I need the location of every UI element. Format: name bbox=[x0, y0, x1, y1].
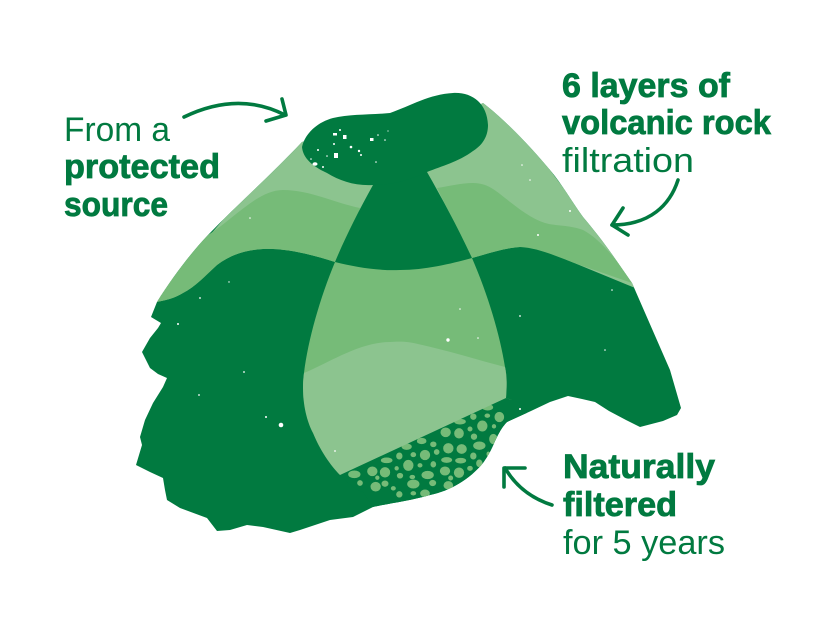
callout: naturally filtered bbox=[504, 448, 725, 562]
text: From a protected source bbox=[64, 111, 220, 224]
text: Naturally filtered for 5 years bbox=[563, 448, 725, 562]
arrow to gravel bbox=[504, 468, 552, 505]
upper layers, clipped to silhouette bbox=[157, 103, 634, 507]
text: Naturally filtered for 5 years: filtered bbox=[563, 486, 677, 524]
text: 6 layers of volcanic rock filtration: 6 layers of bbox=[562, 67, 731, 105]
mid layer left bbox=[150, 190, 360, 303]
text: 6 layers of volcanic rock filtration bbox=[562, 67, 771, 180]
mid layer right bbox=[437, 183, 632, 283]
crater blob bbox=[302, 93, 488, 185]
water drop cross-section bbox=[303, 172, 527, 507]
gravel stones bbox=[349, 405, 504, 497]
arrow to slope bbox=[612, 180, 678, 235]
text: Naturally filtered for 5 years: Naturally bbox=[563, 448, 715, 486]
arrow to crater bbox=[184, 99, 286, 121]
callout: volcanic rock layers bbox=[562, 67, 771, 235]
text: From a protected source: source bbox=[64, 186, 168, 224]
white speckles bbox=[177, 129, 613, 452]
text: Naturally filtered for 5 years: for 5 years bbox=[563, 524, 725, 562]
callout: protected source bbox=[64, 99, 286, 224]
text: From a protected source: From a bbox=[64, 111, 170, 149]
rock silhouette base bbox=[136, 103, 681, 533]
light top layer bbox=[150, 90, 640, 305]
text: 6 layers of volcanic rock filtration: filtration bbox=[562, 142, 694, 180]
infographic: volcanic filtration diagram bbox=[64, 72, 772, 561]
drop dark top bbox=[335, 172, 472, 262]
drop light layer bbox=[303, 342, 507, 475]
volcano illustration bbox=[136, 90, 681, 533]
text: 6 layers of volcanic rock filtration: volcanic rock bbox=[562, 104, 771, 142]
text: From a protected source: protected bbox=[64, 148, 220, 186]
drop dark base bbox=[303, 371, 527, 507]
drop mid layer bbox=[303, 258, 512, 400]
